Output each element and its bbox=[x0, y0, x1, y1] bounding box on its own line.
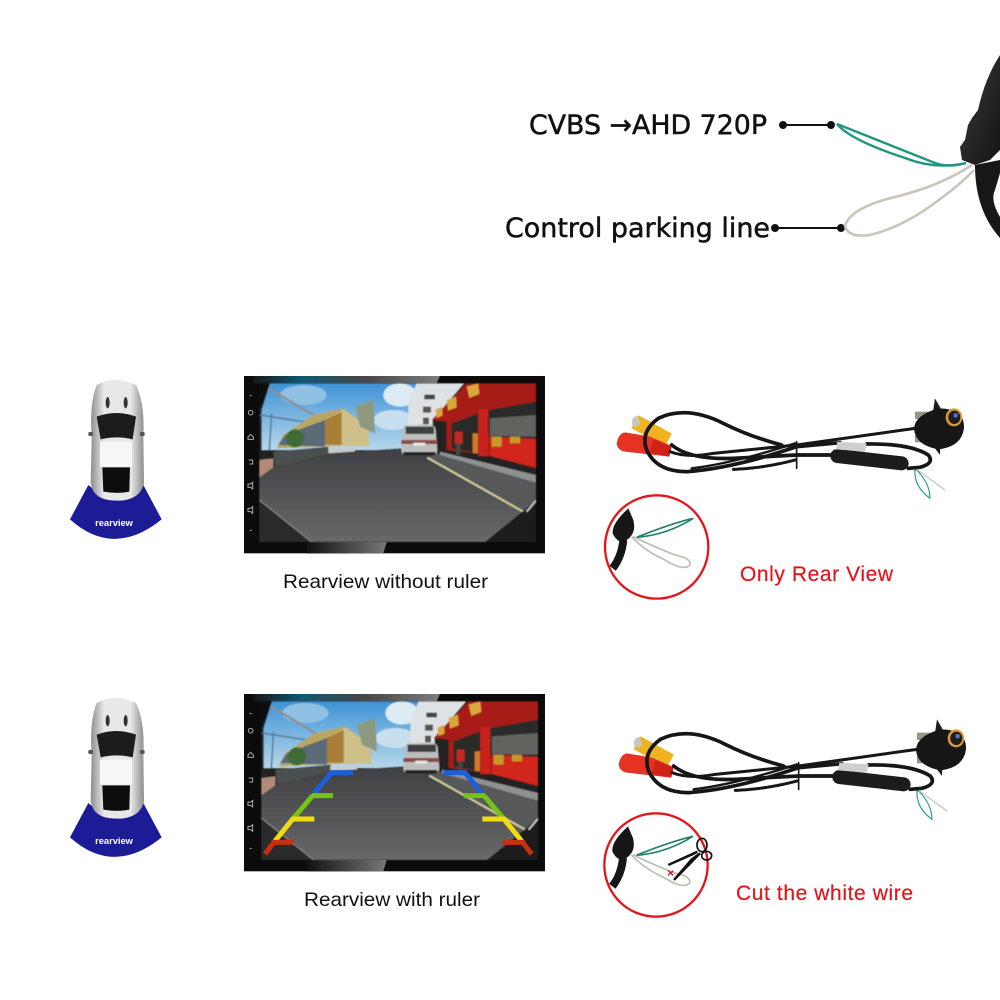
inset: cut the wire bbox=[604, 813, 712, 917]
row 2: rearview with ruler bbox=[70, 694, 966, 917]
label: control parking line: Control parking line bbox=[505, 213, 770, 244]
top panel: wire closeup bbox=[505, 55, 1000, 244]
red note: Cut the white wire bbox=[736, 882, 913, 905]
parking guide lines bbox=[265, 773, 532, 854]
cut mark bbox=[668, 871, 673, 875]
camera cable set bbox=[617, 398, 964, 498]
icon: scissors bbox=[668, 838, 712, 880]
icon: car with rearview zone: rearview bbox=[95, 836, 134, 846]
green wire loop bbox=[837, 124, 966, 166]
caption: Rearview without ruler bbox=[283, 571, 489, 593]
label: CVBS to AHD: CVBS →AHD 720P bbox=[529, 110, 767, 141]
head unit screen bbox=[244, 376, 545, 553]
icon: car with rearview zone bbox=[70, 380, 162, 539]
camera cable set bbox=[619, 719, 966, 819]
leader line: CVBS bbox=[780, 122, 834, 128]
inset: uncut wires bbox=[605, 495, 708, 599]
leader line: parking bbox=[772, 225, 844, 231]
row 1: rearview without ruler bbox=[70, 376, 964, 599]
icon: car with rearview zone bbox=[70, 698, 162, 857]
black cable and molded connector bbox=[960, 55, 1000, 238]
icon: car with rearview zone: rearview bbox=[95, 518, 134, 528]
head unit screen with parking lines bbox=[244, 694, 545, 871]
caption: Rearview with ruler bbox=[304, 889, 481, 911]
red note: Only Rear View bbox=[740, 563, 894, 586]
white wire loop bbox=[845, 165, 974, 236]
